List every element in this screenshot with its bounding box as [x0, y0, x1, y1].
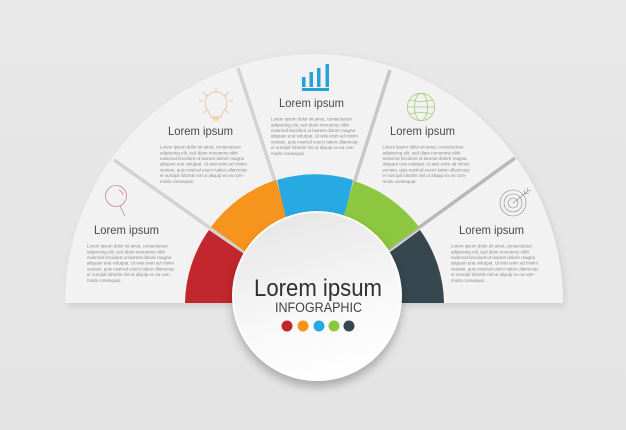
text block: panel 5: adipiscing elit, sed diam nonummy nibh — [451, 249, 529, 255]
text block: panel 3: aliquam erat volutpat. Ut wisi enim ad minim — [271, 134, 358, 140]
text block: panel 1: adipiscing elit, sed diam nonummy nibh — [87, 249, 165, 255]
text block: panel 2 — [160, 145, 248, 185]
text block: panel 2: euismod tincidunt ut laoreet dolore magna — [160, 156, 244, 162]
text block: panel 4: modo consequat. — [382, 179, 416, 185]
text block: panel 5: aliquam erat volutpat. Ut wisi enim ad minim — [451, 261, 538, 267]
separator: centre-right — [343, 70, 390, 218]
ring segment: blue — [277, 174, 353, 222]
text block: panel 3: er suscipit lobortis nisl ut aliquip ex ea com- — [271, 145, 355, 151]
centre title: Lorem ipsum — [254, 275, 382, 302]
text block: panel 1: euismod tincidunt ut laoreet dolore magna — [87, 255, 171, 261]
heading: panel 1: Lorem ipsum — [94, 223, 159, 237]
icon: globe — [407, 93, 435, 121]
separator: left — [114, 160, 244, 252]
heading: panel 4: Lorem ipsum — [390, 124, 455, 138]
panel: half-circle background — [65, 54, 563, 303]
text block: panel 4 — [382, 145, 471, 185]
icon: light bulb — [199, 88, 233, 120]
text block: panel 2: er suscipit lobortis nisl ut aliquip ex ea com- — [160, 173, 244, 179]
text block: panel 3: Lorem ipsum dolor sit amet, consectetuer — [271, 117, 352, 123]
separator: right — [388, 158, 515, 250]
centre subtitle: INFOGRAPHIC — [275, 300, 362, 315]
text block: panel 4: euismod tincidunt ut laoreet dolore magna — [382, 156, 467, 162]
text block: panel 4: Lorem ipsum dolor sit amet, consectetuer — [382, 145, 464, 151]
heading: panel 3: Lorem ipsum — [279, 96, 344, 110]
text block: panel 2: aliquam erat volutpat. Ut wisi enim ad minim — [160, 162, 247, 168]
text block: panel 5: Lorem ipsum dolor sit amet, consectetuer — [451, 244, 532, 250]
text block: panel 5: euismod tincidunt ut laoreet dolore magna — [451, 255, 535, 261]
ring segment: orange — [211, 180, 290, 253]
text block: panel 3 — [271, 117, 359, 157]
text block: panel 2: modo consequat. — [160, 179, 194, 185]
ring segment: red — [185, 230, 250, 303]
text block: panel 3: modo consequat. — [271, 151, 305, 157]
ring segment: dark slate — [390, 230, 444, 303]
text block: panel 4: adipiscing elit, sed diam nonummy nibh — [382, 150, 461, 156]
text block: panel 5 — [451, 244, 539, 284]
centre disc — [232, 211, 402, 381]
text block: panel 2: veniam, quis nostrud exerci tation ullamcorp- — [160, 167, 248, 173]
heading: panel 5: Lorem ipsum — [459, 223, 524, 237]
text block: panel 1: er suscipit lobortis nisl ut aliquip ex ea com- — [87, 272, 171, 278]
text block: panel 3: adipiscing elit, sed diam nonummy nibh — [271, 122, 349, 128]
text block: panel 3: veniam, quis nostrud exerci tation ullamcorp- — [271, 139, 359, 145]
text block: panel 3: euismod tincidunt ut laoreet dolore magna — [271, 128, 355, 134]
text block: panel 2: adipiscing elit, sed diam nonummy nibh — [160, 150, 238, 156]
text block: panel 1: Lorem ipsum dolor sit amet, consectetuer — [87, 244, 168, 250]
text block: panel 2: Lorem ipsum dolor sit amet, consectetuer — [160, 145, 241, 151]
icon: bar chart — [302, 64, 329, 91]
separator: centre-left — [238, 68, 287, 218]
text block: panel 1 — [87, 244, 175, 284]
text block: panel 5: modo consequat. — [451, 278, 485, 284]
text block: panel 1: modo consequat. — [87, 278, 121, 284]
text block: panel 5: veniam, quis nostrud exerci tation ullamcorp- — [451, 266, 539, 272]
text block: panel 4: veniam, quis nostrud exerci tation ullamcorp- — [382, 167, 471, 173]
colour dots — [282, 320, 354, 332]
ring segment: green — [342, 181, 419, 250]
text block: panel 4: er suscipit lobortis nisl ut aliquip ex ea com- — [382, 173, 467, 179]
icon: magnifier — [106, 186, 126, 216]
text block: panel 1: aliquam erat volutpat. Ut wisi enim ad minim — [87, 261, 174, 267]
heading: panel 2: Lorem ipsum — [168, 124, 233, 138]
icon: target with arrow — [500, 188, 531, 216]
text block: panel 1: veniam, quis nostrud exerci tation ullamcorp- — [87, 266, 175, 272]
text block: panel 4: aliquam erat volutpat. Ut wisi enim ad minim — [382, 162, 470, 168]
text block: panel 5: er suscipit lobortis nisl ut aliquip ex ea com- — [451, 272, 535, 278]
